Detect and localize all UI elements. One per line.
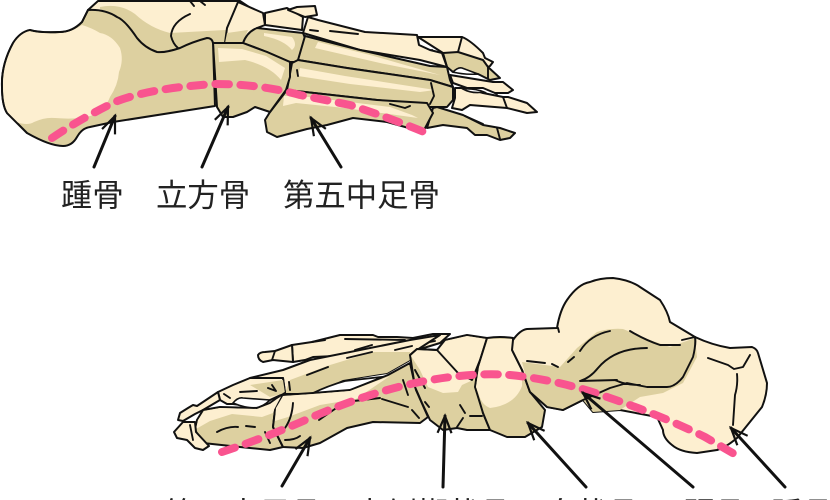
arrow to cuboid	[202, 107, 228, 167]
arrow to calcaneus	[94, 116, 115, 167]
talus, lower foot	[512, 278, 697, 412]
toes, lower foot	[174, 378, 285, 450]
labels, upper foot	[61, 178, 440, 213]
lower foot skeleton	[174, 278, 767, 455]
arrow to medial cuneiform	[443, 416, 445, 487]
label: calcaneus: 踵骨	[61, 178, 124, 213]
cuboid, upper foot	[213, 43, 290, 117]
outer toe and metatarsal bones, lower foot	[258, 334, 450, 362]
pink arch line, lower foot	[222, 374, 736, 455]
arrows, upper foot	[94, 107, 341, 167]
pink arch line, upper foot	[52, 84, 424, 138]
fifth metatarsal, upper foot	[265, 90, 433, 137]
arrow to calcaneus	[731, 428, 785, 487]
calcaneus, lower foot	[583, 337, 767, 453]
calcaneus, upper foot	[2, 10, 215, 146]
arrows, lower foot	[282, 393, 785, 487]
toes, upper foot	[418, 37, 537, 140]
arrow to navicular	[528, 423, 586, 487]
arrow to fifth metatarsal	[311, 118, 341, 167]
arrow to first metatarsal	[282, 438, 310, 486]
first metatarsal, lower foot	[273, 363, 428, 448]
label: fifth metatarsal: 第五中足骨	[283, 178, 440, 213]
second and third metatarsals with hole, lower foot	[250, 335, 440, 394]
talus, upper foot	[88, 1, 258, 52]
labels, lower foot	[165, 496, 830, 500]
arrow to talus	[583, 393, 693, 487]
label: cuboid: 立方骨	[156, 178, 250, 213]
metatarsals, upper foot	[287, 17, 453, 107]
upper foot skeleton	[2, 1, 537, 146]
medial and second cuneiforms, lower foot	[410, 335, 490, 430]
navicular, lower foot	[475, 337, 545, 437]
cuneiforms and cuboid-adjacent tarsals, upper foot	[225, 2, 317, 62]
